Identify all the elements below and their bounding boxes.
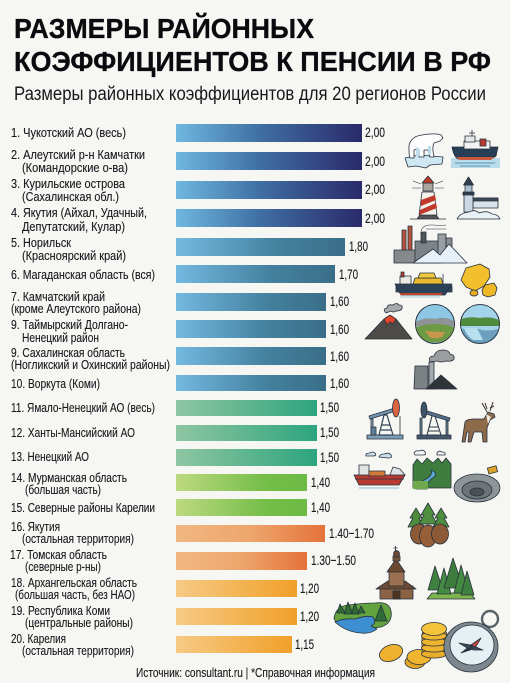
title: КОЭФФИЦИЕНТОВ К ПЕНСИИ В РФ [14,46,491,77]
row 14 [11,470,330,497]
row 13: 13. Ненецкий АО [11,449,89,464]
row 19: 19. Республика Коми [11,603,110,618]
row 16: 16. Якутия [11,519,60,534]
icon: icebreaker ship [451,130,500,168]
row 14: (большая часть) [25,482,101,497]
icon: forest and river [413,450,451,489]
icon: compass [444,611,498,672]
row 14: 1,40 [311,474,330,490]
row 13: 1,50 [320,449,339,465]
row 10: 1,60 [330,375,349,391]
row 12: 12. Ханты-Мансийский АО [11,425,135,440]
title [14,12,491,77]
row 10: 10. Воркута (Коми) [11,376,100,391]
row 9 [11,345,349,372]
row 1: 1. Чукотский АО (весь) [11,125,126,140]
row 20: 1,15 [295,636,314,652]
row 7 [11,289,349,316]
icon: lighthouse with building [457,177,500,219]
row 4: 4. Якутия (Айхал, Удачный, [11,205,147,220]
row 5: 1,80 [349,238,368,254]
row 18: 1,20 [300,580,319,596]
row 1 [11,124,385,142]
row 20 [11,631,314,658]
icon: gold coins [377,622,447,668]
row 9: 9. Сахалинская область [11,345,125,360]
row 17 [10,547,356,574]
row 4: Депутатский, Кулар) [22,219,125,234]
row 17: (северные р-ны) [25,559,101,574]
row 15 [11,499,330,516]
icon: gold nuggets [461,264,497,297]
icon: river landscape circle [460,304,500,344]
row 18 [11,575,319,602]
row 17: 17. Томская область [10,547,107,562]
row 19: (центральные районы) [25,615,133,630]
row 5: (Красноярский край) [22,248,126,263]
source note: Источник: consultant.ru | *Справочная информация [136,665,375,680]
row 1: 2,00 [365,124,385,140]
row 15: 15. Северные районы Карелии [11,500,155,515]
row 7: 7. Камчатский край [11,289,105,304]
row 17: 1.30−1.50 [311,552,356,568]
row 18: 18. Архангельская область [11,575,137,590]
row 8: 1,60 [330,321,349,337]
icon: pine trees and cones [408,503,449,547]
row 8: Ненецкий район [22,330,99,345]
row 12 [11,424,339,441]
row 20: 20. Карелия [11,631,66,646]
row 5: 5. Норильск [11,235,71,250]
row 11: 11. Ямало-Ненецкий АО (весь) [11,400,155,415]
row 2 [11,147,385,175]
row 8 [11,317,349,345]
row 2: 2. Алеутский р-н Камчатки [11,147,145,162]
row 3: (Сахалинская обл.) [22,189,119,204]
icon: factory with snow [394,225,467,263]
icon: reindeer [462,402,495,442]
icon: cargo ship with gold [395,272,452,297]
row 7: (кроме Алеутского района) [11,301,141,316]
icon: striped lighthouse [410,176,446,219]
row 16: (остальная территория) [22,531,134,546]
row 19 [11,603,319,630]
row 3: 2,00 [365,181,385,197]
row 2: (Командорские о-ва) [22,160,128,175]
row 16: 1.40−1.70 [329,525,374,541]
icon: spruce forest [427,558,475,599]
icon: coal plant [414,350,457,389]
row 14: 14. Мурманская область [11,470,127,485]
row 7: 1,60 [330,293,349,309]
icon: tundra landscape circle [416,304,454,344]
row 10 [11,375,349,391]
row 3 [11,176,385,204]
row 5 [11,235,368,263]
icon: open pit mine [454,466,500,502]
icon: lake with trees [334,602,391,633]
row 3: 3. Курильские острова [11,176,126,191]
row 19: 1,20 [300,608,319,624]
row 9: (Ногликский и Охинский районы) [11,357,170,372]
icon: oil pump dark [417,402,451,439]
title: РАЗМЕРЫ РАЙОННЫХ [14,12,314,44]
row 2: 2,00 [365,153,385,169]
row 11: 1,50 [320,399,339,415]
row 6 [11,265,358,283]
row 16 [11,519,374,546]
row 6: 6. Магаданская область (вся) [11,267,155,282]
icon: tanker ship [354,452,405,488]
row 4 [11,205,385,234]
row 8: 9. Таймырский Долгано- [11,317,128,332]
row 9: 1,60 [330,348,349,364]
row 13 [11,449,339,466]
row 6: 1,70 [339,266,358,282]
bar chart [10,124,385,658]
row 12: 1,50 [320,424,339,440]
icon: volcano [365,304,412,339]
icon: oil pump blue [367,399,403,439]
row 4: 2,00 [365,210,385,226]
row 15: 1,40 [311,499,330,515]
icon: polar bear on ice [405,134,443,168]
row 18: (большая часть, без НАО) [15,587,135,602]
icon: wooden church [376,546,416,599]
row 20: (остальная территория) [22,643,134,658]
row 11 [11,399,339,416]
